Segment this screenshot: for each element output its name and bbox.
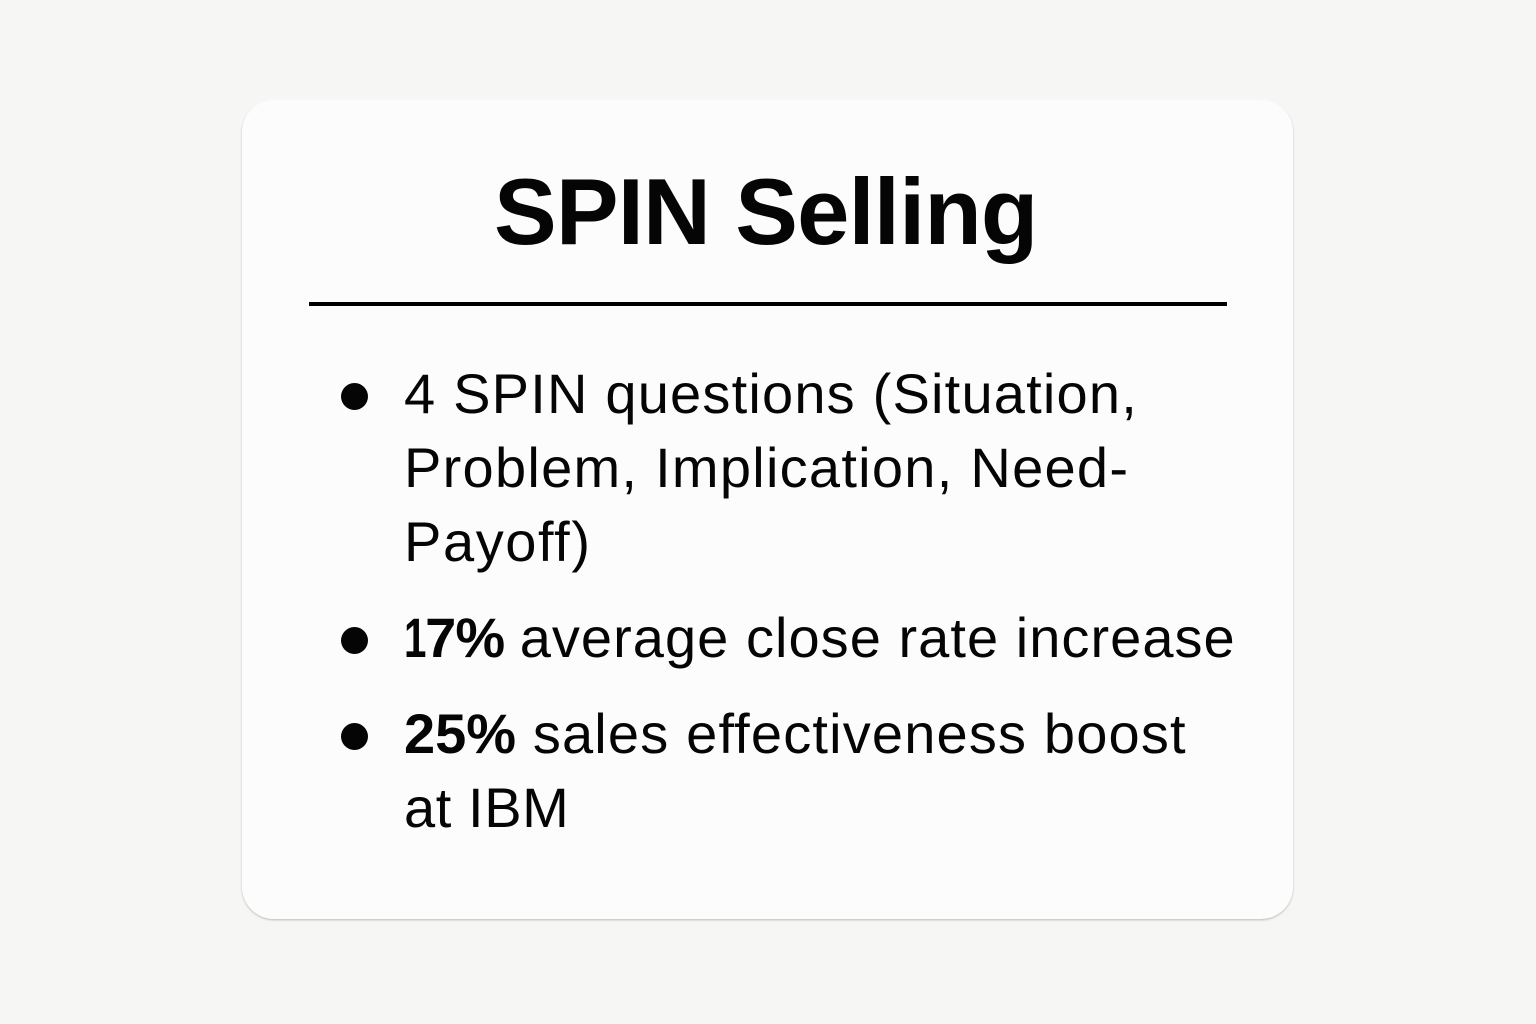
bullet 3 text bbox=[404, 702, 1187, 839]
bullet 3 text: 25% sales effectiveness boost bbox=[404, 702, 1187, 765]
bullet 1 text bbox=[404, 362, 1138, 573]
panel: card bbox=[242, 100, 1293, 919]
bullet 2 marker bbox=[341, 627, 368, 654]
bullet 2 text: 7% average close rate increase bbox=[425, 606, 1236, 669]
bullet 2 text: 1 bbox=[404, 606, 426, 669]
bullet 1 text: Problem, Implication, Need- bbox=[404, 436, 1129, 499]
bullet 1 marker bbox=[341, 383, 368, 410]
title: SPIN Selling bbox=[494, 159, 1037, 264]
bullet 1 text: 4 SPIN questions (Situation, bbox=[404, 362, 1138, 425]
bullet 1 text: Payoff) bbox=[404, 510, 592, 573]
heading divider bbox=[309, 302, 1227, 306]
bullet 3 marker bbox=[341, 723, 368, 750]
bullet 3 text: at IBM bbox=[404, 776, 569, 839]
